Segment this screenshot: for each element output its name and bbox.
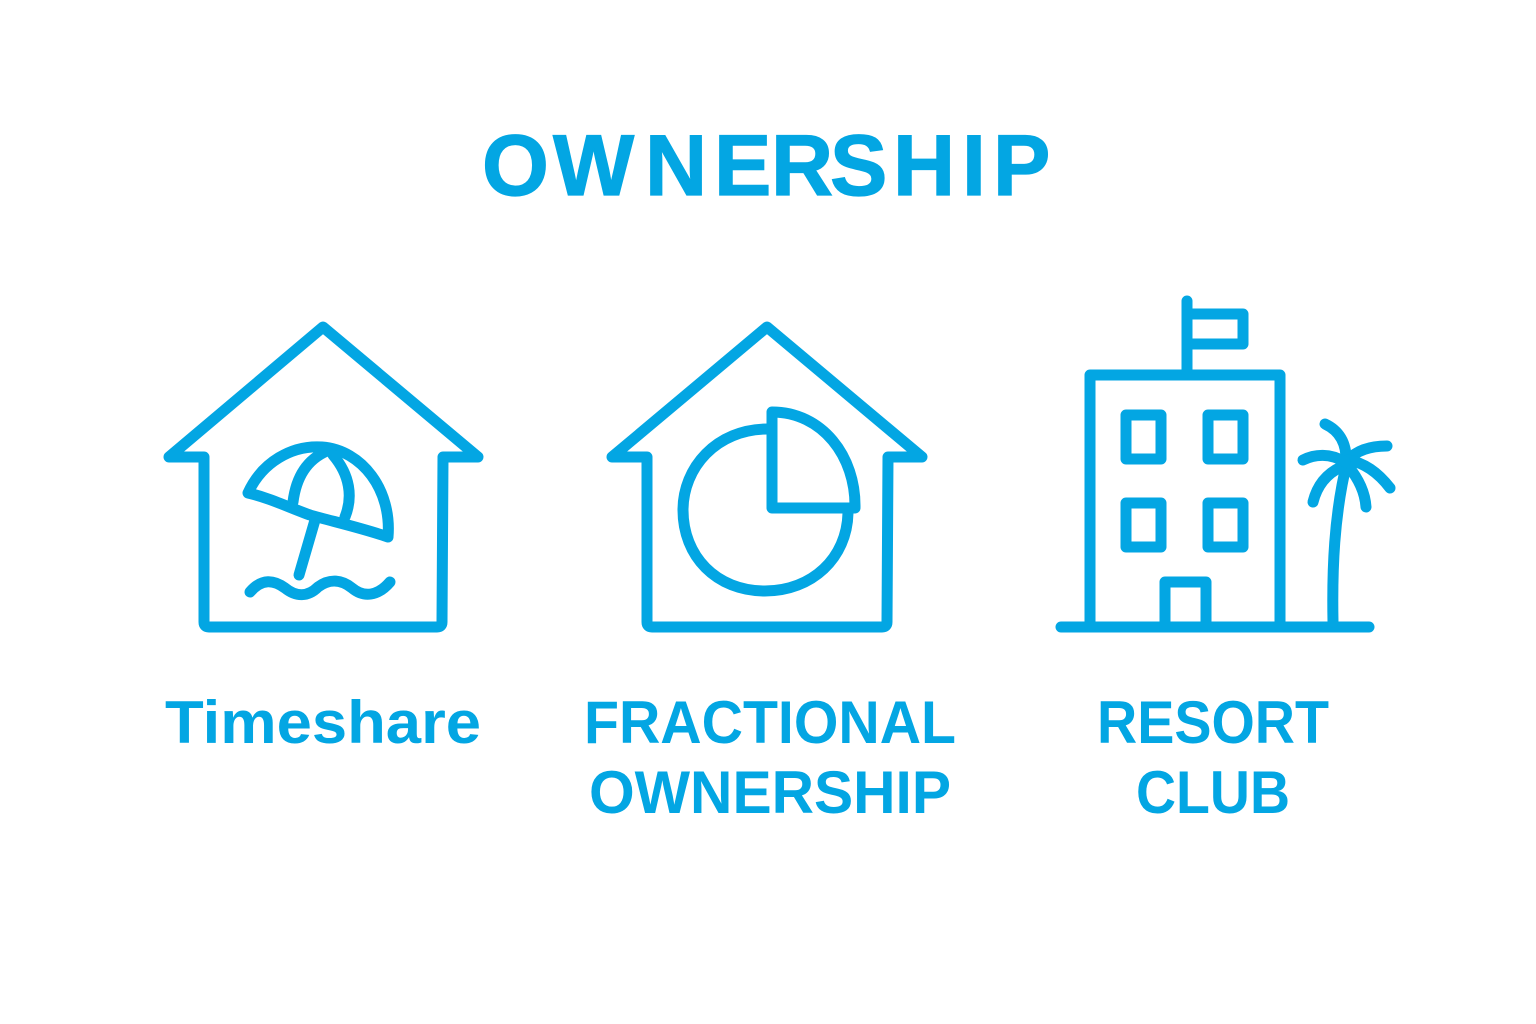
label: Fractional Ownership [584, 689, 956, 826]
label: Resort Club: RESORT [1097, 689, 1329, 756]
label: Timeshare: Timeshare [165, 689, 481, 756]
label: Fractional Ownership: OWNERSHIP [589, 759, 951, 826]
title: OWNERSHIP [482, 118, 1050, 214]
icon: palm tree [1303, 424, 1390, 622]
icon: house with pie chart [612, 327, 922, 627]
icon: door [1165, 582, 1206, 627]
icon: pie chart [683, 412, 855, 591]
icon: resort hotel with palm tree [1061, 301, 1390, 627]
label: Resort Club [1097, 689, 1329, 826]
icon: flag [1187, 301, 1243, 373]
icon: house with beach umbrella [169, 327, 478, 627]
icon: windows [1126, 415, 1243, 547]
icon: beach umbrella [248, 447, 390, 595]
label: Fractional Ownership: FRACTIONAL [584, 689, 956, 756]
label: Resort Club: CLUB [1136, 759, 1290, 826]
